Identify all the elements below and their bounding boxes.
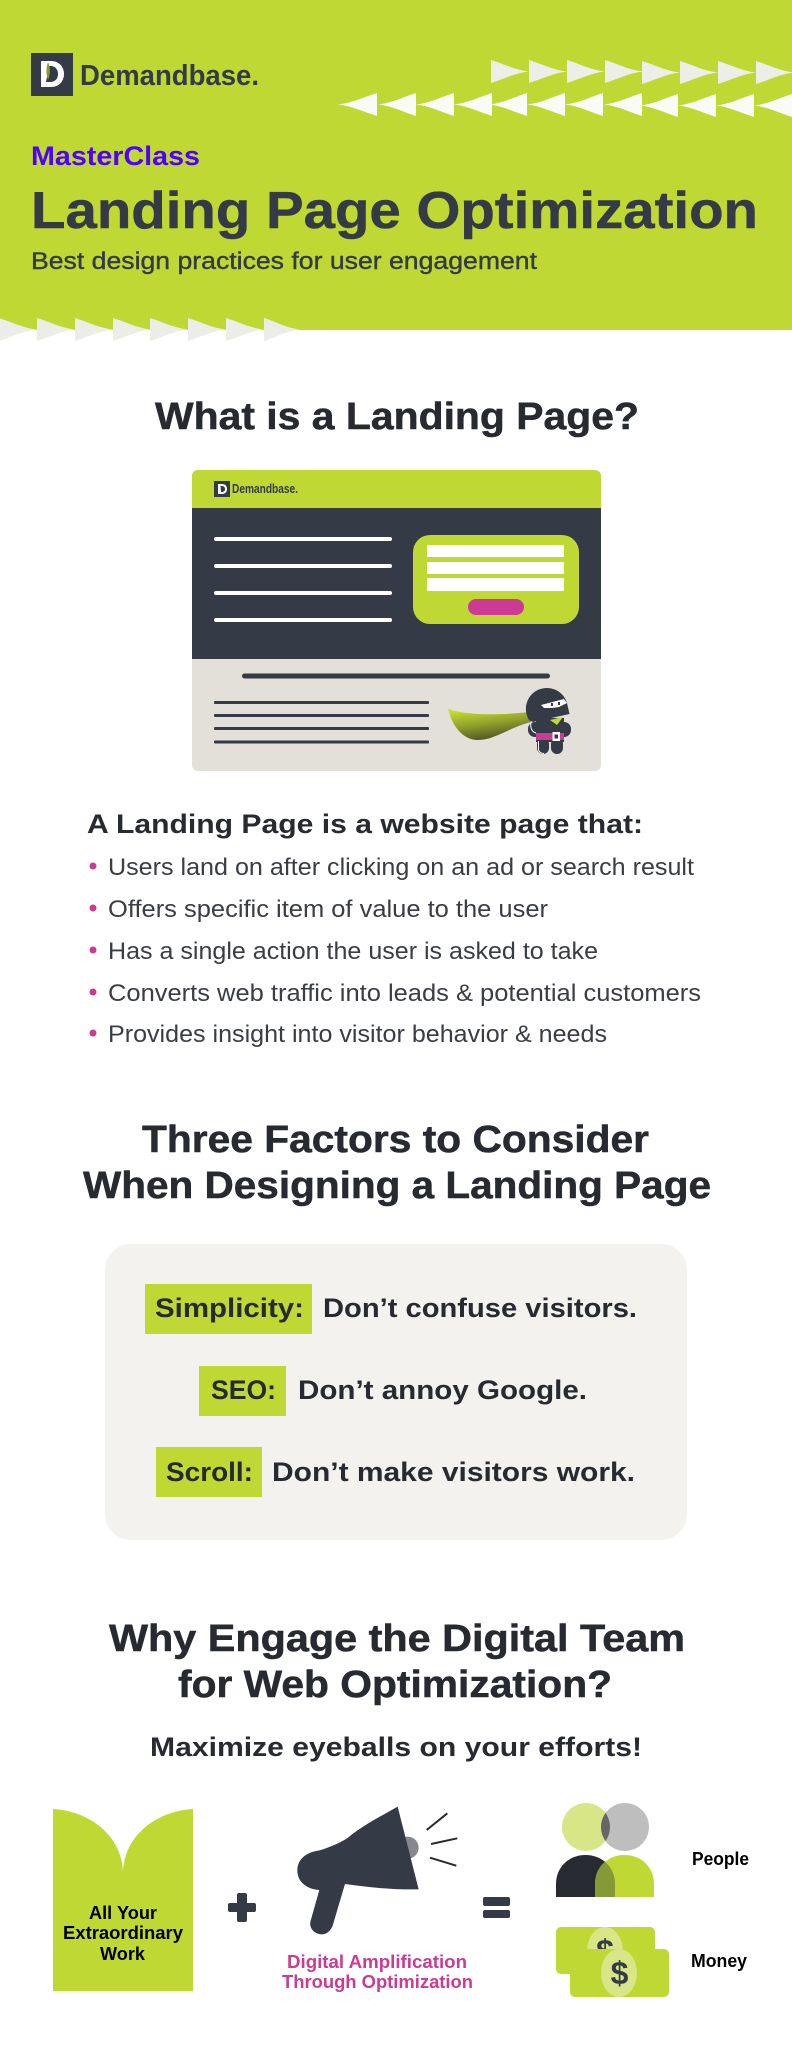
- heading: Why Engage the Digital Team: Why Engage the Digital Team: [109, 1618, 685, 1660]
- factor: SEO: Don’t annoy Google.: [298, 1375, 587, 1405]
- heading: Three Factors: [83, 1119, 711, 1207]
- illustration: landing page mockup: [192, 470, 601, 771]
- heading: Three Factors: Three Factors to Consider: [142, 1119, 649, 1161]
- mockup logo: [214, 481, 298, 497]
- heading: Three Factors: When Designing a Landing Page: [83, 1165, 711, 1207]
- logo: Demandbase: [31, 53, 259, 96]
- icon: megaphone: [297, 1807, 457, 1934]
- icon: money: $: [611, 1955, 629, 1991]
- book shape: All Your Extraordinary Work: All Your: [89, 1903, 157, 1923]
- bullet 2: Offers specific item of value to the user: [108, 896, 548, 923]
- panel: three factors: [105, 1244, 687, 1540]
- title: Landing Page Optimization: [31, 182, 758, 240]
- bullet 3: Has a single action the user is asked to take: [108, 938, 598, 965]
- heading: Why Engage the Digital Team: [109, 1618, 685, 1706]
- label: Money: Money: [691, 1951, 747, 1971]
- bullet 5: Provides insight into visitor behavior & needs: [108, 1021, 607, 1048]
- lead form: [413, 535, 579, 624]
- hero text lines: [214, 537, 392, 622]
- factor: Scroll: [156, 1447, 635, 1497]
- heading: Why Engage the Digital Team: for Web Optimization?: [178, 1664, 612, 1706]
- factor: Simplicity: Simplicity:: [155, 1293, 304, 1323]
- ninja mascot: [448, 688, 571, 754]
- mockup page body: [192, 470, 601, 771]
- list heading: A Landing Page is a website page that:: [87, 809, 643, 839]
- caption: Digital Amplification Through Optimization: Through Optimization: [282, 1972, 473, 1992]
- eyebrow: MasterClass: MasterClass: [31, 141, 200, 171]
- definition list: [87, 809, 701, 1048]
- book shape: All Your Extraordinary Work: Extraordinary: [63, 1923, 183, 1943]
- book shape: All Your Extraordinary Work: Work: [100, 1944, 146, 1964]
- lower content lines: [214, 674, 550, 744]
- book shape: All Your Extraordinary Work: [53, 1809, 193, 1991]
- mockup top bar: [192, 470, 601, 508]
- bullet 4: Converts web traffic into leads & potential customers: [108, 980, 701, 1007]
- logo: Demandbase: Demandbase.: [80, 60, 259, 92]
- icon: equals: [483, 1897, 510, 1918]
- decorative arrows: bottom row: [0, 318, 300, 341]
- decorative arrows: second row: [338, 93, 792, 117]
- factor: Simplicity: Don’t confuse visitors.: [323, 1293, 637, 1323]
- mockup hero: [192, 508, 601, 659]
- factor: Scroll: Scroll:: [166, 1457, 253, 1487]
- icon: money: $: [596, 1933, 614, 1969]
- heading: What is a Landing Page?: What is a Landing Page?: [155, 396, 639, 438]
- icon: people: [556, 1803, 654, 1897]
- bullet 1: Users land on after clicking on an ad or search result: [108, 854, 694, 881]
- subheading: Maximize eyeballs: Maximize eyeballs on your efforts!: [150, 1732, 642, 1762]
- mockup logo: Demandbase.: [232, 481, 298, 496]
- label: People: People: [692, 1849, 749, 1869]
- factor: SEO: SEO:: [211, 1375, 276, 1405]
- subtitle: Best design practices for user engagement: [31, 248, 537, 275]
- factor: SEO: [199, 1366, 587, 1416]
- header banner: [0, 0, 792, 341]
- decorative arrows: top row: [491, 60, 792, 84]
- icon: money: [556, 1927, 669, 1997]
- factor: Scroll: Don’t make visitors work.: [272, 1457, 635, 1487]
- caption: Digital Amplification Through Optimization: [282, 1952, 473, 1992]
- icon: plus: [228, 1893, 256, 1922]
- caption: Digital Amplification Through Optimization: Digital Amplification: [287, 1952, 467, 1972]
- factor: Simplicity: [145, 1284, 637, 1334]
